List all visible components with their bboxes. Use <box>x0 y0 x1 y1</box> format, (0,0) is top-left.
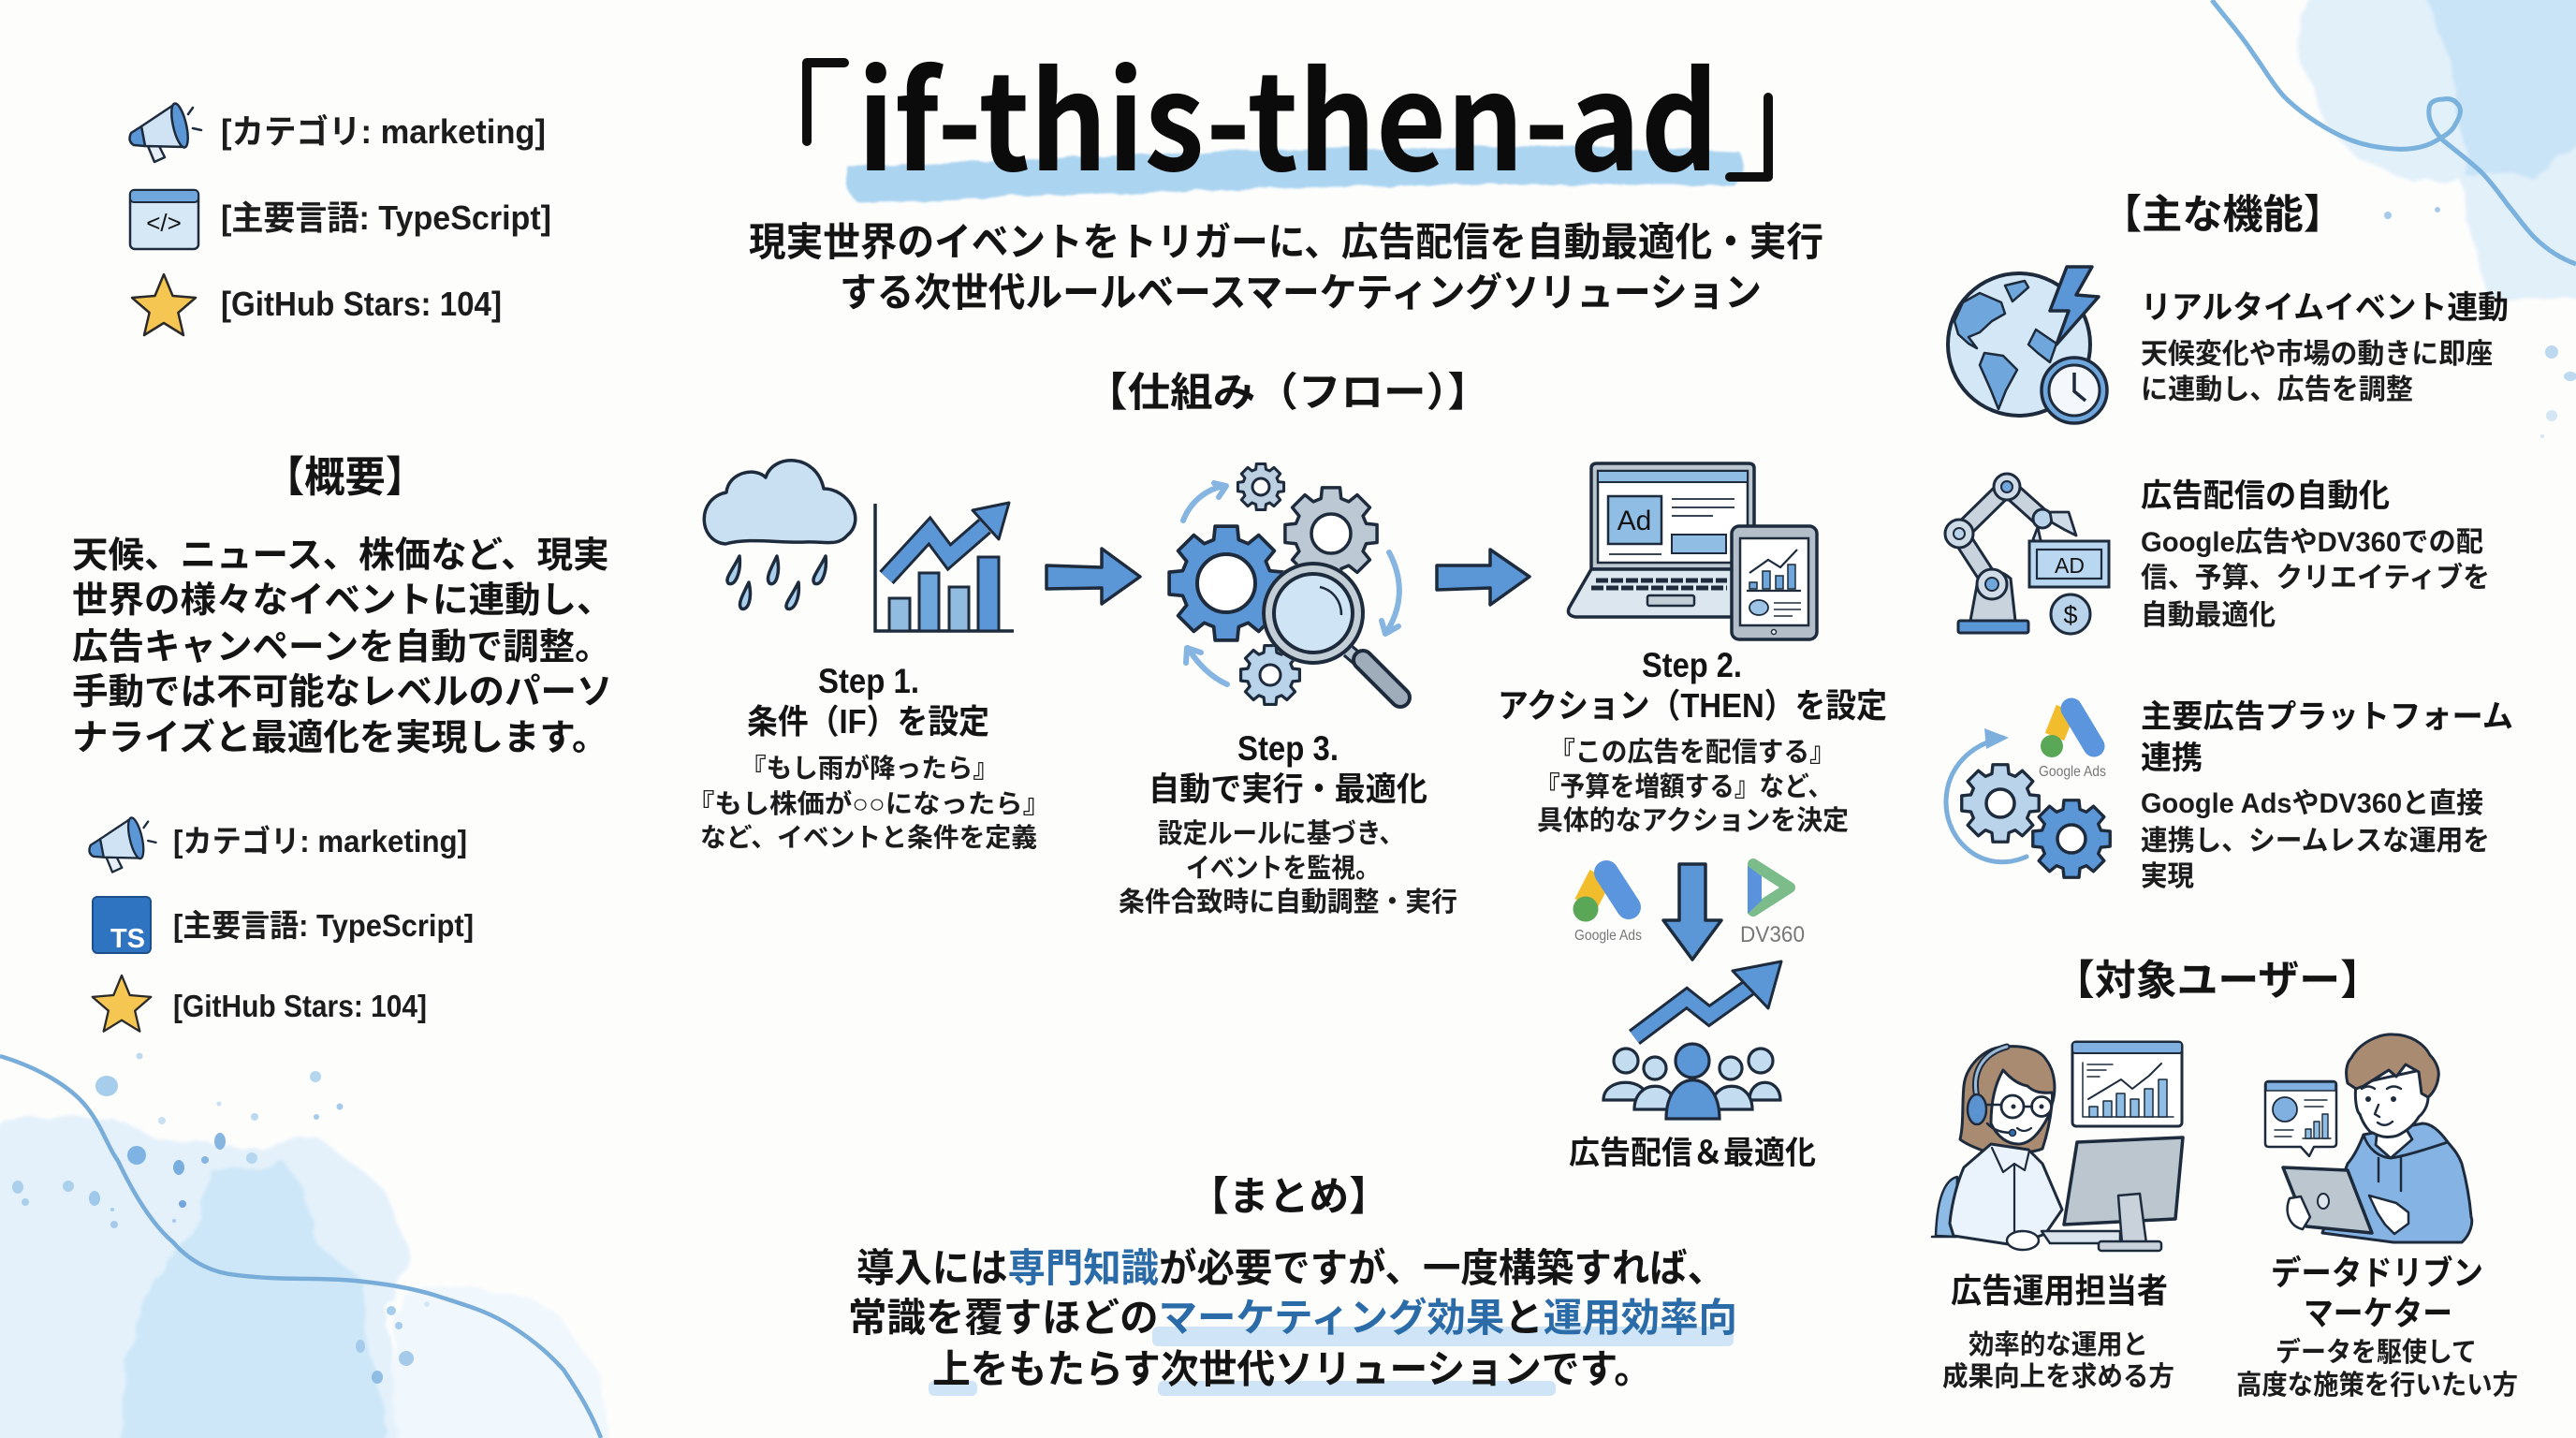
stars text: [GitHub Stars: 104] <box>173 989 427 1023</box>
panel: flow <box>687 371 1887 1171</box>
feature 3 text: 連携 <box>2141 741 2203 776</box>
feature 2 text: 自動最適化 <box>2141 600 2276 631</box>
heading: features: 【主な機能】 <box>2101 193 2344 238</box>
illustration: ad operator <box>1932 1042 2183 1251</box>
summary highlights <box>929 1327 1734 1396</box>
overview body text: ナライズと最適化を実現します。 <box>72 718 608 758</box>
operator text: 成果向上を求める方 <box>1942 1361 2174 1392</box>
overview body text: 世界の様々なイベントに連動し、 <box>72 580 613 621</box>
feature 1 text: に連動し、広告を調整 <box>2141 374 2413 405</box>
heading: flow: 【仕組み（フロー）】 <box>1085 371 1490 416</box>
step 3 text <box>1119 729 1457 917</box>
icon: robot arm with ad: AD <box>2055 553 2085 578</box>
gear: blue <box>1169 526 1283 640</box>
step 2 text: 『予算を増額する』など、 <box>1535 771 1833 802</box>
icon: TypeScript <box>93 897 151 954</box>
language text: [主要言語: TypeScript] <box>173 908 474 943</box>
gear: small bottom <box>1241 646 1299 704</box>
metadata list: top <box>130 102 551 335</box>
feature 2 text: Google広告やDV360での配 <box>2141 527 2483 558</box>
step 3 text: 条件合致時に自動調整・実行 <box>1119 887 1457 917</box>
summary text <box>848 1246 1737 1391</box>
icon: megaphone <box>130 102 201 162</box>
step 1 text: 『もし雨が降ったら』 <box>740 753 999 783</box>
step 2 text: Step 2. <box>1642 646 1742 684</box>
title block <box>749 16 1823 315</box>
feature 1 text: リアルタイムイベント連動 <box>2141 290 2509 326</box>
heading: overview: 【概要】 <box>264 453 426 501</box>
marketer text: データを駆使して <box>2276 1336 2477 1368</box>
icon: megaphone small <box>89 816 156 873</box>
feature 1 text <box>2141 290 2509 405</box>
title brush underline <box>845 147 1743 202</box>
overview body text: 天候、ニュース、株価など、現実 <box>72 536 609 576</box>
icon: integration gears: Google Ads <box>2039 764 2106 780</box>
laptop: Ad <box>1617 506 1651 536</box>
step 3 text: イベントを監視。 <box>1186 853 1380 884</box>
feature 3 text: 実現 <box>2141 861 2194 892</box>
category text: [カテゴリ: marketing] <box>173 824 467 858</box>
icon: integration gears <box>1946 709 2110 877</box>
title left bracket <box>807 63 844 141</box>
marketer text: データドリブン <box>2271 1254 2483 1292</box>
marketer text: 高度な施策を行いたい方 <box>2236 1370 2518 1401</box>
watercolor: top right corner <box>2212 0 2576 438</box>
feature 1 text: 天候変化や市場の動きに即座 <box>2141 339 2493 370</box>
step 1 text: など、イベントと条件を定義 <box>700 823 1037 852</box>
magnifier <box>1262 562 1400 697</box>
arrow: step 1 to step 3 <box>1046 549 1140 604</box>
step 1 text: 『もし株価が○○になったら』 <box>687 788 1050 818</box>
step 3 text: 自動で実行・最適化 <box>1149 771 1427 808</box>
heading: target users: 【対象ユーザー】 <box>2054 958 2381 1004</box>
icon: code window <box>130 190 198 249</box>
marketer text <box>2236 1254 2518 1401</box>
delivery illustration: growth and audience <box>1603 961 1781 1119</box>
icon: star <box>132 274 196 335</box>
step 1 text: Step 1. <box>818 662 919 700</box>
panel: overview <box>72 453 613 758</box>
step 2 text: アクション（THEN）を設定 <box>1498 686 1887 725</box>
operator text: 広告運用担当者 <box>1951 1271 2168 1310</box>
overview body text <box>72 536 613 758</box>
feature 2 text: 広告配信の自動化 <box>2141 478 2390 514</box>
icon: DV360 logo: DV360 <box>1740 922 1805 947</box>
metadata list: bottom <box>89 816 474 1032</box>
subtitle: する次世代ルールベースマーケティングソリューション <box>840 271 1762 315</box>
marketer text: マーケター <box>2304 1294 2452 1332</box>
panel: target users <box>1932 958 2518 1401</box>
overview body text: 広告キャンペーンを自動で調整。 <box>72 627 611 668</box>
summary text: 導入には専門知識が必要ですが、一度構築すれば、 <box>856 1246 1725 1290</box>
icon: globe with lightning and clock <box>1948 267 2107 423</box>
feature 3 text: 主要広告プラットフォーム <box>2141 699 2513 735</box>
chart: rising bars <box>875 503 1014 631</box>
summary text: 常識を覆すほどのマーケティング効果と運用効率向 <box>848 1296 1737 1340</box>
icon: code window: </> <box>146 209 182 237</box>
subtitle: 現実世界のイベントをトリガーに、広告配信を自動最適化・実行 <box>749 220 1823 264</box>
feature 2 text <box>2141 478 2490 631</box>
step 2 text: 『この広告を配信する』 <box>1549 737 1836 768</box>
watercolor: bottom left corner <box>0 1052 608 1438</box>
feature 2 text: 信、予算、クリエイティブを <box>2141 562 2490 594</box>
step 3 illustration: gears and magnifier <box>1169 463 1400 704</box>
icon: robot arm with ad <box>1945 474 2109 634</box>
operator text <box>1942 1271 2174 1392</box>
illustration: data-driven marketer <box>2265 1034 2472 1242</box>
arrow: down to delivery <box>1663 864 1721 960</box>
step 2 text: 具体的なアクションを決定 <box>1537 805 1849 836</box>
operator text: 効率的な運用と <box>1969 1329 2148 1360</box>
step 1 illustration <box>704 461 1014 631</box>
overview body text: 手動では不可能なレベルのパーソ <box>72 672 613 712</box>
step 3 text: Step 3. <box>1237 729 1339 768</box>
step 2 text <box>1498 646 1887 836</box>
language text: [主要言語: TypeScript] <box>221 198 551 237</box>
delivery label: 広告配信＆最適化 <box>1569 1136 1816 1171</box>
step 1 text: 条件（IF）を設定 <box>747 702 989 741</box>
icon: TypeScript: TS <box>110 924 145 954</box>
step 1 text <box>687 662 1050 852</box>
cycle arrows <box>1183 483 1399 684</box>
icon: rain cloud <box>704 461 856 609</box>
step 2 illustration: laptop and tablet <box>1568 463 1817 639</box>
subtitle <box>749 220 1823 315</box>
icon: DV360 logo <box>1740 864 1805 947</box>
arrow: step 3 to step 2 <box>1437 550 1530 605</box>
feature 3 text: Google AdsやDV360と直接 <box>2141 788 2483 819</box>
title right bracket <box>1730 97 1768 177</box>
title text: if-this-then-ad <box>857 16 1719 210</box>
heading: summary: 【まとめ】 <box>1189 1175 1389 1220</box>
feature 3 text <box>2141 699 2513 892</box>
gear: gray <box>1285 488 1377 580</box>
icon: star small <box>93 976 151 1032</box>
stars text: [GitHub Stars: 104] <box>221 285 502 323</box>
panel: summary <box>848 1175 1737 1396</box>
icon: robot arm with ad: $ <box>2063 601 2078 629</box>
step 3 text: 設定ルールに基づき、 <box>1158 818 1404 849</box>
laptop <box>1568 463 1754 617</box>
icon: Google Ads logo <box>1573 873 1642 944</box>
panel: key features <box>1945 193 2513 892</box>
gear: small top <box>1237 463 1284 510</box>
summary text: 上をもたらす次世代ソリューションです。 <box>932 1347 1652 1391</box>
tablet <box>1732 526 1817 639</box>
feature 3 text: 連携し、シームレスな運用を <box>2141 826 2490 857</box>
icon: Google Ads logo: Google Ads <box>1574 928 1642 944</box>
category text: [カテゴリ: marketing] <box>221 112 546 151</box>
